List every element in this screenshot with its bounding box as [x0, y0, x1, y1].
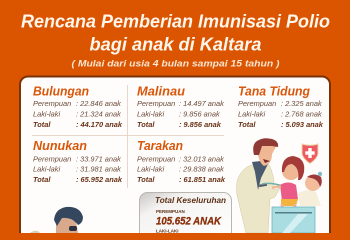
region: Nunukan: Perempuan — [33, 154, 71, 164]
title: bagi anak di Kaltara — [90, 34, 262, 54]
region: Bulungan: : 22.846 anak — [76, 99, 121, 108]
panel: white data panel — [20, 76, 330, 240]
region: Tana Tidung: : 2.325 anak — [281, 99, 322, 108]
subtitle: ( Mulai dari usia 4 bulan sampai 15 tahun ) — [72, 58, 280, 70]
region: Bulungan: : 44.170 anak — [76, 120, 123, 129]
illustration: doctor — [236, 138, 283, 233]
title: Rencana Pemberian Imunisasi Polio — [21, 12, 330, 32]
region: Tarakan: : 29.838 anak — [179, 164, 224, 174]
region: Tarakan: Laki-laki — [137, 164, 164, 174]
region: Tana Tidung: : 2.768 anak — [281, 110, 322, 118]
region: Malinau: Perempuan — [137, 99, 175, 108]
region: Bulungan: Bulungan — [33, 84, 89, 98]
region: Malinau: : 9.856 anak — [179, 110, 220, 118]
region: Malinau: Total — [137, 120, 155, 129]
region: Bulungan: : 21.324 anak — [76, 110, 121, 118]
region: Tana Tidung: Perempuan — [238, 99, 276, 108]
panel: overall total: PEREMPUAN — [156, 209, 185, 214]
illustration: second health worker — [30, 207, 83, 233]
region: Nunukan: : 65.952 anak — [76, 175, 123, 184]
region: Malinau: : 14.497 anak — [179, 99, 224, 108]
region: Tana Tidung: : 5.093 anak — [281, 120, 324, 129]
region: Malinau: Laki-laki — [137, 110, 164, 118]
region: Nunukan: Nunukan — [33, 138, 87, 153]
region: Malinau: : 9.856 anak — [179, 120, 222, 129]
region: Tarakan: Total — [137, 175, 155, 184]
region: Tana Tidung: Tana Tidung — [238, 84, 310, 98]
region: Nunukan: : 33.971 anak — [76, 154, 121, 164]
region: Nunukan: Total — [33, 175, 51, 184]
region: Nunukan: : 31.981 anak — [76, 164, 121, 174]
panel: overall total: Total Keseluruhan — [155, 196, 226, 205]
region: Tana Tidung: Laki-laki — [238, 110, 265, 118]
region: Nunukan: Laki-laki — [33, 164, 60, 174]
region: Bulungan — [33, 84, 123, 129]
region: Bulungan: Perempuan — [33, 99, 71, 108]
illustration: child on table — [272, 156, 304, 220]
region: Malinau: Malinau — [137, 84, 185, 98]
region: Tarakan: Tarakan — [137, 138, 183, 153]
icon: shield with cross — [302, 144, 318, 164]
region: Tarakan: : 61.851 anak — [179, 175, 226, 184]
panel: overall total: 105.652 ANAK — [156, 216, 222, 228]
region: Bulungan: Laki-laki — [33, 110, 60, 118]
illustration: examination table — [272, 207, 315, 233]
region: Bulungan: Total — [33, 120, 51, 129]
region: Tarakan: : 32.013 anak — [179, 154, 224, 164]
title — [21, 12, 330, 54]
panel: overall total — [140, 192, 232, 240]
region: Tarakan: Perempuan — [137, 154, 175, 164]
region: Malinau — [137, 84, 224, 129]
region: Nunukan — [33, 138, 123, 184]
region: Tana Tidung: Total — [238, 120, 256, 129]
region: Tarakan — [137, 138, 226, 184]
illustration: baby — [298, 172, 322, 206]
region: Tana Tidung — [238, 84, 324, 129]
